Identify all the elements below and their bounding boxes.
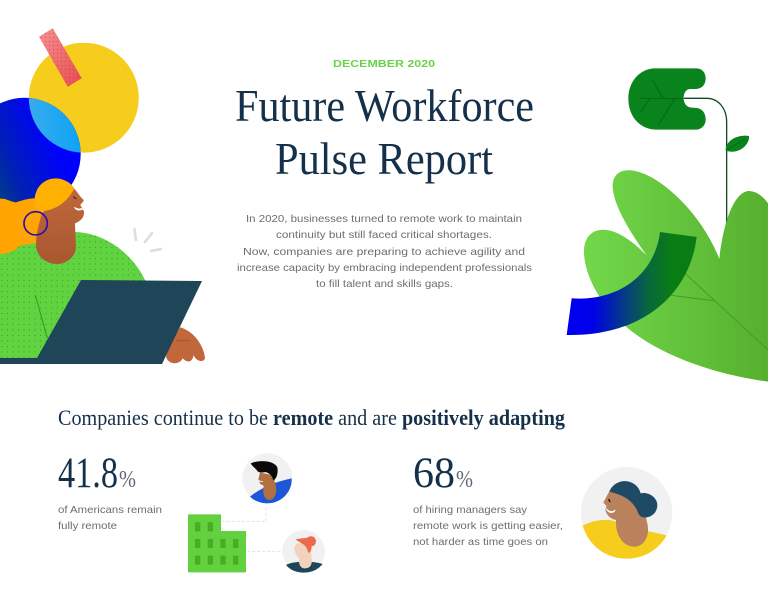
stat: 68%: 68 bbox=[413, 450, 455, 497]
stat: 41.8% bbox=[58, 450, 162, 532]
stat: 41.8%: % bbox=[119, 467, 136, 493]
green body bbox=[0, 232, 145, 358]
building bbox=[188, 514, 246, 572]
light blue overlap bbox=[28, 98, 81, 152]
gradient arc bbox=[567, 232, 697, 335]
hand bbox=[166, 327, 205, 363]
illustration: woman with laptop bbox=[0, 28, 205, 364]
intro paragraph: Now, companies are preparing to achieve agility and bbox=[243, 246, 525, 258]
excitement marks bbox=[134, 229, 161, 251]
avatar: hiring manager bbox=[581, 467, 672, 559]
intro paragraph: In 2020, businesses turned to remote work to maintain bbox=[246, 213, 522, 225]
hair front bbox=[34, 178, 74, 211]
hair back bbox=[0, 198, 43, 254]
earring bbox=[24, 212, 47, 235]
intro paragraph: continuity but still faced critical shortages. bbox=[276, 229, 492, 241]
avatar: man bbox=[242, 453, 292, 503]
stat: 68% bbox=[413, 450, 563, 548]
yellow circle bbox=[29, 43, 139, 153]
title: Pulse Report bbox=[275, 133, 493, 184]
blue circle bbox=[0, 98, 81, 210]
illustration: building and remote workers bbox=[188, 507, 325, 573]
avatar: woman bbox=[282, 530, 325, 573]
stat: 68%: not harder as time goes on bbox=[413, 536, 548, 548]
intro paragraph: to fill talent and skills gaps. bbox=[316, 278, 453, 290]
stat: 68%: % bbox=[456, 467, 473, 493]
dark green leaf bbox=[628, 68, 706, 130]
stat: 68%: remote work is getting easier, bbox=[413, 520, 563, 532]
pink bandage bbox=[39, 28, 82, 87]
large green leaves bbox=[584, 170, 768, 382]
laptop bbox=[0, 280, 202, 364]
intro paragraph bbox=[237, 213, 532, 290]
small leaf bbox=[726, 136, 749, 152]
title bbox=[235, 80, 534, 184]
head and neck bbox=[36, 188, 84, 264]
stat: 41.8%: of Americans remain bbox=[58, 504, 162, 516]
dashed connectors bbox=[222, 507, 282, 551]
stat: 68%: of hiring managers say bbox=[413, 504, 528, 516]
title: Future Workforce bbox=[235, 80, 534, 131]
illustration: plant bbox=[567, 68, 768, 382]
stat: 41.8%: 41.8 bbox=[58, 450, 118, 497]
stem bbox=[684, 98, 727, 227]
intro paragraph: increase capacity by embracing independent professionals bbox=[237, 262, 532, 274]
date label: DECEMBER 2020 bbox=[333, 58, 435, 70]
stat: 41.8%: fully remote bbox=[58, 520, 117, 532]
section heading: Companies continue to be remote and are positively adapting bbox=[58, 405, 566, 430]
